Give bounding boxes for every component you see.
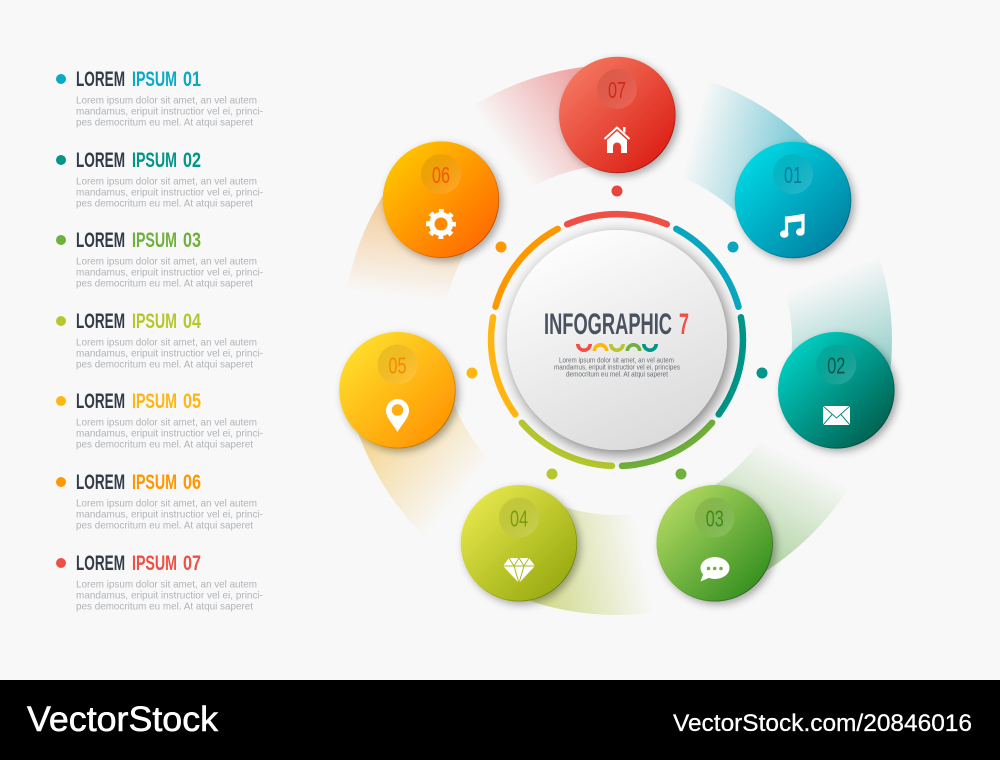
ring segment 06 bbox=[496, 229, 558, 307]
icon: music note bbox=[780, 214, 805, 238]
legend item 05: mandamus, eripuit instructior vel ei, princi- bbox=[76, 428, 263, 440]
number 04: 04 bbox=[510, 506, 528, 532]
number 01: 01 bbox=[784, 162, 802, 188]
connector dots bbox=[466, 186, 768, 480]
band 07 bbox=[485, 115, 617, 158]
legend item 07: Lorem ipsum dolor sit amet, an vel autem bbox=[76, 578, 257, 590]
ring segment 03 bbox=[622, 423, 712, 466]
legend item 07: pes democritum eu mel. At atqui saperet bbox=[76, 601, 253, 613]
legend item 03: Lorem ipsum dolor sit amet, an vel autem bbox=[76, 255, 257, 267]
icon: chat bubble bbox=[700, 557, 730, 582]
legend item 01: IPSUM bbox=[132, 68, 177, 91]
legend item 01 bbox=[56, 68, 263, 129]
central title number: 7 bbox=[679, 308, 689, 341]
icon: envelope bbox=[823, 406, 850, 425]
legend item 06: mandamus, eripuit instructior vel ei, princi- bbox=[76, 508, 263, 520]
legend list bbox=[56, 68, 263, 613]
legend item 06: 06 bbox=[183, 471, 201, 494]
legend item 05: IPSUM bbox=[132, 390, 177, 413]
icon: gear bbox=[428, 211, 454, 237]
icon: diamond bbox=[503, 558, 535, 583]
band 01 bbox=[675, 123, 793, 200]
step circle 05 bbox=[339, 332, 456, 449]
number 03: 03 bbox=[706, 506, 724, 532]
legend item 02: pes democritum eu mel. At atqui saperet bbox=[76, 198, 253, 210]
legend item 04: LOREM bbox=[76, 310, 125, 333]
legend item 05: Lorem ipsum dolor sit amet, an vel autem bbox=[76, 416, 257, 428]
legend item 01: 01 bbox=[183, 68, 201, 91]
central text: Lorem ipsum dolor sit amet, an vel autem bbox=[559, 356, 674, 365]
legend item 06: pes democritum eu mel. At atqui saperet bbox=[76, 520, 253, 532]
legend item 05 bbox=[56, 390, 263, 451]
legend item 04: Lorem ipsum dolor sit amet, an vel autem bbox=[76, 336, 257, 348]
ring segment 05 bbox=[491, 317, 515, 414]
central title: INFOGRAPHIC bbox=[544, 308, 672, 341]
dot 04 bbox=[546, 468, 558, 480]
central text bbox=[554, 356, 680, 379]
legend item 03: IPSUM bbox=[132, 229, 177, 252]
band 04 bbox=[519, 543, 664, 565]
legend item 02: mandamus, eripuit instructior vel ei, princi- bbox=[76, 186, 263, 198]
legend item 02 bbox=[56, 149, 263, 210]
dot 06 bbox=[496, 242, 506, 252]
legend item 06: IPSUM bbox=[132, 471, 177, 494]
legend item 04: mandamus, eripuit instructior vel ei, princi- bbox=[76, 348, 263, 360]
band 06 bbox=[393, 200, 441, 316]
legend item 05: pes democritum eu mel. At atqui saperet bbox=[76, 439, 253, 451]
legend item 04: IPSUM bbox=[132, 310, 177, 333]
band 03 bbox=[715, 446, 816, 543]
footer brand: VectorStock bbox=[27, 700, 219, 739]
legend item 03: LOREM bbox=[76, 229, 125, 252]
dot 07 bbox=[612, 186, 622, 196]
legend item 04: 04 bbox=[183, 310, 201, 333]
icon: map pin bbox=[386, 399, 409, 432]
footer bar bbox=[0, 680, 1000, 760]
icon: house bbox=[604, 127, 630, 153]
ring segment 04 bbox=[522, 423, 612, 466]
legend item 03: pes democritum eu mel. At atqui saperet bbox=[76, 278, 253, 290]
step circle 06 bbox=[383, 141, 499, 258]
legend item 01: pes democritum eu mel. At atqui saperet bbox=[76, 117, 253, 129]
central text: democritum eu mel. At atqui saperet bbox=[566, 370, 668, 379]
legend item 06: Lorem ipsum dolor sit amet, an vel autem bbox=[76, 497, 257, 509]
legend item 07: 07 bbox=[183, 552, 201, 575]
central circle panel bbox=[507, 230, 727, 450]
footer image id: VectorStock.com/20846016 bbox=[673, 710, 972, 737]
legend item 03: mandamus, eripuit instructior vel ei, princi- bbox=[76, 266, 263, 278]
legend item 06: LOREM bbox=[76, 471, 125, 494]
number 02: 02 bbox=[827, 352, 845, 378]
ring segment 01 bbox=[676, 229, 738, 307]
central text: mandamus, eripuit instructior vel ei, principes bbox=[554, 363, 680, 372]
dot 05 bbox=[466, 368, 478, 378]
ring segment 07 bbox=[567, 214, 667, 224]
legend item 04 bbox=[56, 310, 263, 371]
legend item 03: 03 bbox=[183, 229, 201, 252]
legend item 02: IPSUM bbox=[132, 149, 177, 172]
legend item 07: mandamus, eripuit instructior vel ei, princi- bbox=[76, 590, 263, 602]
legend item 07: IPSUM bbox=[132, 552, 177, 575]
number 07: 07 bbox=[608, 77, 626, 103]
number 06: 06 bbox=[432, 162, 450, 188]
step circle 07 bbox=[559, 57, 676, 173]
step circle 03 bbox=[656, 485, 773, 602]
segmented colour ring bbox=[491, 214, 743, 466]
main disc bbox=[507, 230, 727, 450]
legend item 02: Lorem ipsum dolor sit amet, an vel autem bbox=[76, 175, 257, 187]
legend item 01: mandamus, eripuit instructior vel ei, princi- bbox=[76, 106, 263, 118]
legend item 06 bbox=[56, 471, 263, 532]
step circle 02 bbox=[778, 332, 895, 449]
step circle 04 bbox=[461, 485, 577, 602]
faded ring bands bbox=[393, 115, 842, 565]
number 05: 05 bbox=[388, 352, 406, 378]
legend item 02: 02 bbox=[183, 149, 201, 172]
dot 03 bbox=[676, 468, 686, 480]
dot 02 bbox=[756, 368, 768, 378]
dot 01 bbox=[728, 242, 738, 252]
legend item 04: pes democritum eu mel. At atqui saperet bbox=[76, 359, 253, 371]
legend item 01: LOREM bbox=[76, 68, 125, 91]
band 02 bbox=[826, 256, 842, 390]
legend item 07: LOREM bbox=[76, 552, 125, 575]
legend item 07 bbox=[56, 552, 263, 613]
legend item 05: 05 bbox=[183, 390, 201, 413]
squiggle divider bbox=[578, 344, 656, 351]
step circle 01 bbox=[735, 142, 851, 258]
legend item 01: Lorem ipsum dolor sit amet, an vel autem bbox=[76, 94, 257, 106]
legend item 02: LOREM bbox=[76, 149, 125, 172]
ring segment 02 bbox=[719, 317, 743, 414]
legend item 03 bbox=[56, 229, 263, 290]
legend item 05: LOREM bbox=[76, 390, 125, 413]
band 05 bbox=[398, 390, 472, 512]
